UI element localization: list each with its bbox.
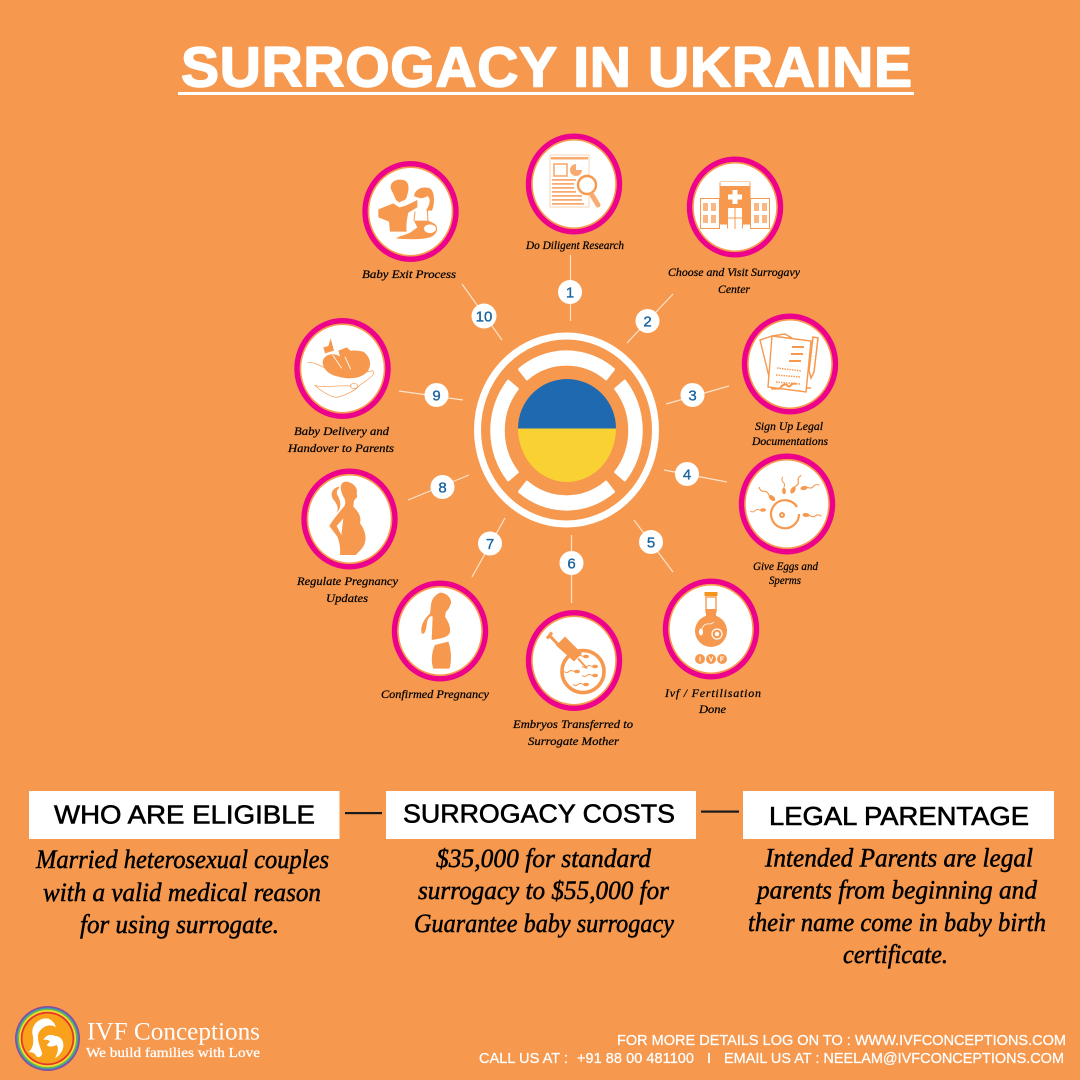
heading: SURROGACY COSTS — [403, 798, 675, 828]
connector and number 1: 1 — [566, 284, 574, 302]
label: Do Diligent Research — [525, 238, 624, 252]
connector and number 4: 4 — [683, 466, 691, 484]
label: Ivf / Fertilisation — [664, 686, 761, 700]
step 10: Baby Exit Process — [362, 164, 502, 340]
icon: IVF flask: V — [709, 656, 714, 664]
connector and number 1 — [558, 255, 582, 321]
panel: who are eligible — [29, 791, 340, 939]
text block: with a valid medical reason — [43, 878, 321, 907]
icon: parents with baby — [365, 164, 456, 259]
step 6: Embryos Transferred — [512, 535, 633, 748]
label: Center — [718, 282, 750, 296]
heading — [743, 791, 1054, 839]
step 4: Give Eggs and Sperms — [664, 456, 832, 587]
heading — [29, 791, 340, 839]
text block: certificate. — [843, 940, 948, 969]
footer contact details: I — [707, 1051, 711, 1067]
heading: LEGAL PARENTAGE — [769, 801, 1029, 831]
step 1: Do Diligent Research — [525, 136, 624, 321]
logo: IVF Conceptions: We build families with Love — [86, 1046, 260, 1061]
icon: IVF flask: F — [720, 656, 725, 664]
label: Sign Up Legal — [755, 419, 824, 433]
icon: syringe and embryos — [528, 613, 620, 708]
footer contact details: +91 88 00 481100 — [577, 1051, 694, 1067]
heading: WHO ARE ELIGIBLE — [54, 800, 315, 830]
label: Baby Delivery and — [294, 424, 390, 438]
icon: IVF flask — [666, 581, 756, 677]
connector and number 8: 8 — [438, 480, 447, 496]
text block: their name come in baby birth — [748, 908, 1046, 937]
icon: baby on open hand — [297, 321, 388, 416]
label: Give Eggs and — [753, 559, 819, 573]
label: Done — [698, 702, 727, 716]
icon: pregnant silhouette — [394, 583, 486, 679]
icon: IVF flask: I — [699, 656, 701, 664]
title: SURROGACY IN UKRAINE — [181, 36, 912, 100]
footer contact details: CALL US AT : — [479, 1051, 568, 1067]
connector and number 3 — [666, 383, 729, 407]
connector and number 2 — [627, 294, 673, 343]
icon: egg and sperm — [742, 456, 832, 552]
label: Sperms — [769, 573, 801, 587]
heading — [386, 791, 696, 839]
central emblem with Ukraine flag — [478, 336, 656, 524]
text block: for using surrogate. — [80, 910, 279, 939]
connector and number 4 — [664, 462, 727, 486]
logo: IVF Conceptions — [15, 1006, 260, 1071]
icon: pregnant woman profile — [304, 471, 395, 567]
step 7: Confirmed Pregnancy — [381, 518, 505, 701]
connector and number 9: 9 — [432, 388, 441, 404]
label: Updates — [326, 591, 368, 605]
label: Confirmed Pregnancy — [381, 687, 490, 701]
footer contact details: EMAIL US AT : NEELAM@IVFCONCEPTIONS.COM — [724, 1051, 1064, 1067]
text block: surrogacy to $55,000 for — [418, 876, 670, 905]
connector and number 8 — [408, 475, 469, 500]
connector and number 2: 2 — [643, 314, 652, 330]
connector and number 10 — [462, 284, 502, 340]
step 3: Sign Up Legal Documentations — [666, 316, 836, 448]
connector and number 6 — [560, 535, 584, 603]
connector and number 5: 5 — [647, 534, 655, 552]
footer contact details: FOR MORE DETAILS LOG ON TO : WWW.IVFCONCEPTIONS.COM — [617, 1033, 1066, 1049]
label: Documentations — [751, 434, 828, 448]
text block: $35,000 for standard — [436, 844, 652, 873]
icon: legal documents — [744, 316, 836, 412]
label: Embryos Transferred to — [512, 717, 633, 731]
connector line 2 — [701, 810, 739, 813]
connector and number 9 — [399, 383, 463, 407]
connector and number 10: 10 — [476, 308, 492, 326]
step 5: IVF / Fertilisation Done — [634, 520, 761, 716]
connector and number 7 — [472, 518, 505, 577]
step 9: Baby Delivery and Handover — [287, 321, 463, 455]
logo: IVF Conceptions: IVF Conceptions — [87, 1018, 260, 1046]
connector line 1 — [345, 812, 382, 814]
connector and number 7: 7 — [486, 536, 494, 553]
panel: surrogacy costs — [386, 791, 696, 938]
label: Regulate Pregnancy — [296, 574, 399, 588]
step 8: Regulate Pregnancy Updates — [296, 471, 469, 605]
icon: hospital — [690, 159, 780, 255]
text block: Guarantee baby surrogacy — [414, 909, 674, 938]
label: Baby Exit Process — [362, 267, 456, 281]
connector and number 3: 3 — [688, 388, 697, 404]
connector and number 5 — [634, 520, 673, 572]
connector and number 6: 6 — [567, 556, 576, 572]
text block: Intended Parents are legal — [764, 844, 1033, 872]
text block: parents from beginning and — [755, 876, 1038, 904]
icon: document with magnifier — [528, 136, 620, 232]
label: Choose and Visit Surrogavy — [668, 265, 801, 279]
step 2: Choose and Visit Center — [627, 159, 801, 343]
footer contact details — [479, 1033, 1066, 1067]
label: Surrogate Mother — [528, 734, 619, 748]
text block: Married heterosexual couples — [35, 845, 329, 874]
panel: legal parentage — [743, 791, 1054, 969]
label: Handover to Parents — [287, 441, 394, 455]
